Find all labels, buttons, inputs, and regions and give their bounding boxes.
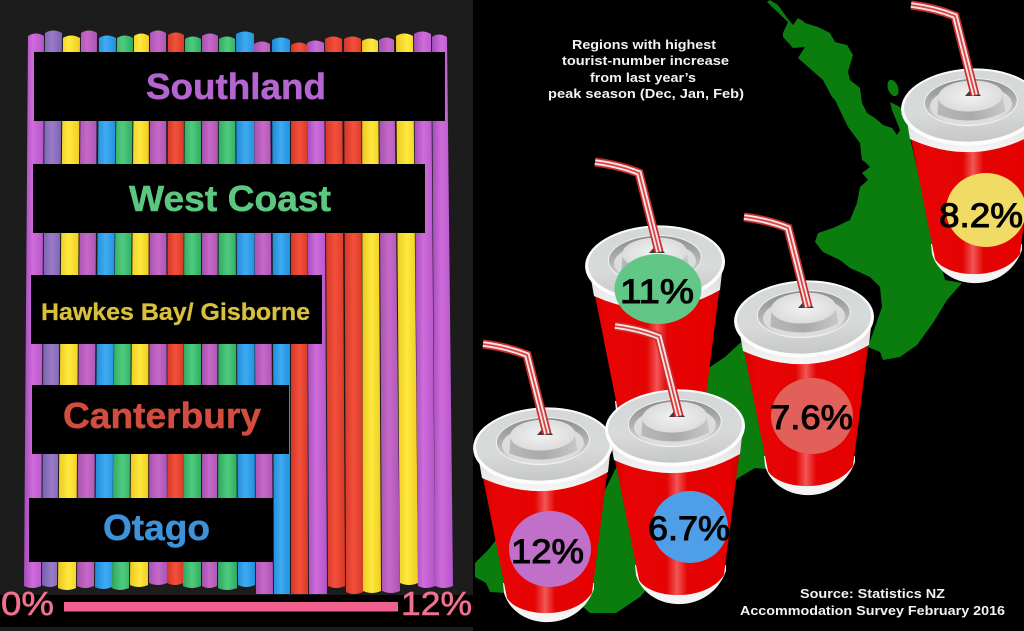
title text: peak season (Dec, Jan, Feb) — [548, 86, 744, 101]
source text — [740, 586, 1005, 618]
bar: West Coast — [33, 164, 425, 233]
bar: Southland — [34, 52, 445, 121]
cup: West Coast 11% — [583, 162, 727, 440]
label: Hawkes Bay/ Gisborne: Hawkes Bay/ Gisborne — [41, 299, 310, 326]
map: North Island of New Zealand — [767, 0, 962, 360]
axis label: 0%: 0% — [1, 585, 54, 622]
label: Southland: Southland — [146, 66, 326, 107]
value: 6.7%: 6.7% — [648, 510, 730, 548]
value: 11%: 11% — [620, 273, 694, 311]
bar: Hawkes Bay / Gisborne — [31, 275, 322, 344]
panel: straw bar chart background — [0, 0, 473, 631]
axis label: 12%: 12% — [401, 585, 472, 622]
cup: Southland 12% — [471, 344, 615, 622]
title text: tourist-number increase — [562, 53, 729, 68]
panel: map background — [473, 0, 1024, 631]
map: Fiordland coast — [475, 540, 530, 593]
label: Canterbury: Canterbury — [63, 395, 261, 436]
source text: Source: Statistics NZ — [800, 586, 945, 601]
value: 8.2%: 8.2% — [939, 197, 1023, 235]
label: Otago: Otago — [103, 507, 210, 548]
value: 7.6%: 7.6% — [770, 399, 853, 437]
cup: Canterbury 7.6% — [732, 217, 876, 495]
bar: Otago — [29, 498, 273, 562]
source text: Accommodation Survey February 2016 — [740, 603, 1005, 618]
map: South Island of New Zealand — [575, 343, 790, 613]
panel: coloured straws — [24, 30, 453, 594]
title text: from last year’s — [590, 70, 696, 85]
axis: 0% to 12% scale — [0, 585, 473, 627]
bar: Canterbury — [32, 385, 289, 454]
cup: Otago 6.7% — [603, 326, 747, 604]
value: 12%: 12% — [511, 533, 584, 571]
label: West Coast: West Coast — [129, 178, 331, 219]
map: Great Barrier Island — [885, 78, 901, 98]
title text — [548, 37, 744, 101]
title text: Regions with highest — [572, 37, 717, 52]
cup: Hawkes Bay / Gisborne 8.2% — [899, 5, 1024, 283]
